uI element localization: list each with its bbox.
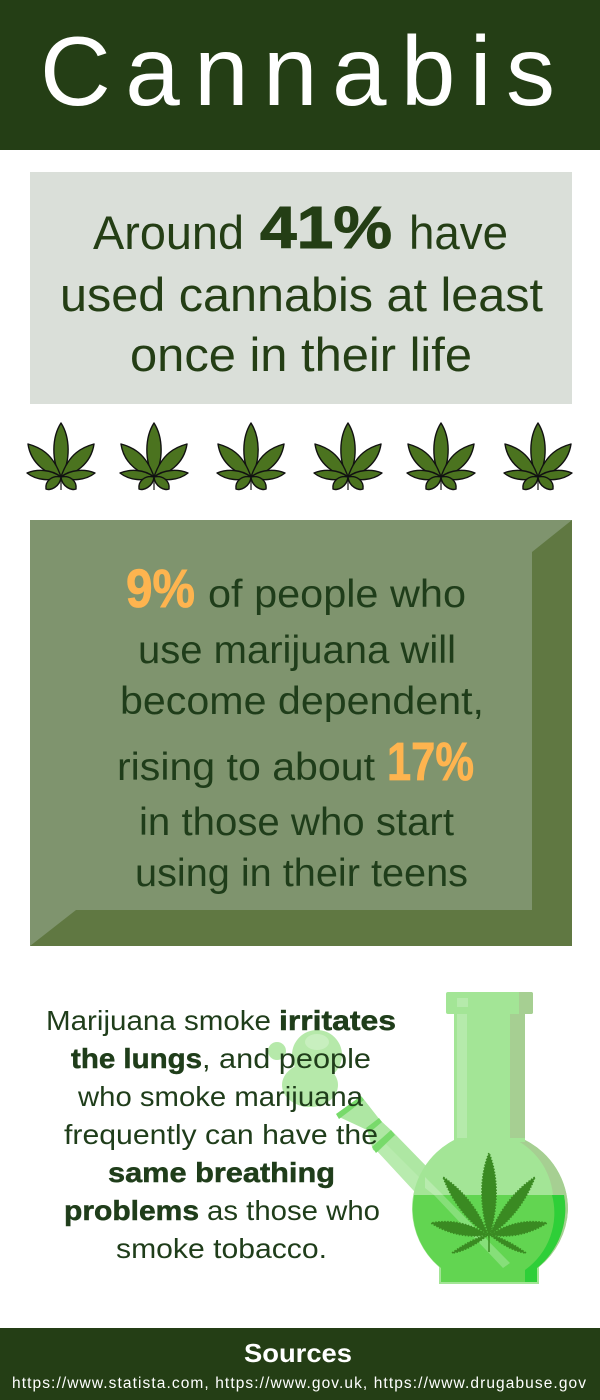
text block: lung effects: problems [64, 1195, 199, 1226]
icon row: cannabis leaves [27, 423, 572, 490]
panel: dependency statistic: use marijuana will [138, 629, 456, 672]
icon: green bong with leaf and smoke [268, 992, 568, 1284]
panel: 41% statistic: once in their life [130, 328, 472, 381]
text block: lung effects: , and people [202, 1043, 371, 1074]
panel: dependency statistic: rising to about [117, 746, 375, 789]
leaf stem [488, 1235, 490, 1252]
panel: dependency statistic: in those who start [139, 801, 454, 844]
panel: 41% statistic: 41% [260, 195, 392, 261]
text block: lung effects: the lungs [71, 1043, 202, 1074]
neck [454, 1012, 525, 1142]
panel: dependency statistic: using in their teens [135, 852, 468, 895]
footer: sources: Sources [244, 1338, 352, 1368]
text block: lung effects: as those who [207, 1195, 380, 1226]
panel: dependency statistic: of people who [208, 573, 466, 616]
text block: lung effects: smoke tobacco. [116, 1233, 327, 1264]
text block: lung effects: Marijuana smoke [46, 1005, 271, 1036]
panel: 41% statistic: Around [93, 206, 244, 259]
text block: lung effects [46, 1005, 396, 1264]
bowl [412, 1140, 568, 1284]
bowl shade [510, 1137, 568, 1267]
smoke [268, 1030, 342, 1107]
panel: dependency statistic: 17% [387, 732, 474, 792]
panel: dependency statistic [30, 520, 572, 946]
lip [446, 992, 533, 1014]
title: Cannabis [40, 16, 555, 126]
water [413, 1195, 565, 1282]
panel: dependency statistic: become dependent, [120, 680, 484, 723]
tube inside bowl [425, 1177, 443, 1195]
text block: lung effects: who smoke marijuana [77, 1081, 364, 1112]
tube [337, 1097, 430, 1192]
footer: sources: https://www.statista.com, https://www.gov.uk, https://www.drugabuse.gov [12, 1375, 586, 1392]
panel: 41% statistic [30, 172, 572, 404]
panel: dependency statistic: 9% [126, 559, 195, 619]
panel: 41% statistic: have [409, 206, 508, 259]
text block: lung effects: frequently can have the [64, 1119, 378, 1150]
panel: 41% statistic: used cannabis at least [60, 268, 543, 321]
text block: lung effects: same breathing [108, 1157, 335, 1188]
tube bands [336, 1096, 364, 1119]
leaf in water [431, 1153, 547, 1253]
header banner [0, 0, 600, 150]
footer: sources [0, 1328, 600, 1400]
text block: lung effects: irritates [279, 1005, 396, 1036]
